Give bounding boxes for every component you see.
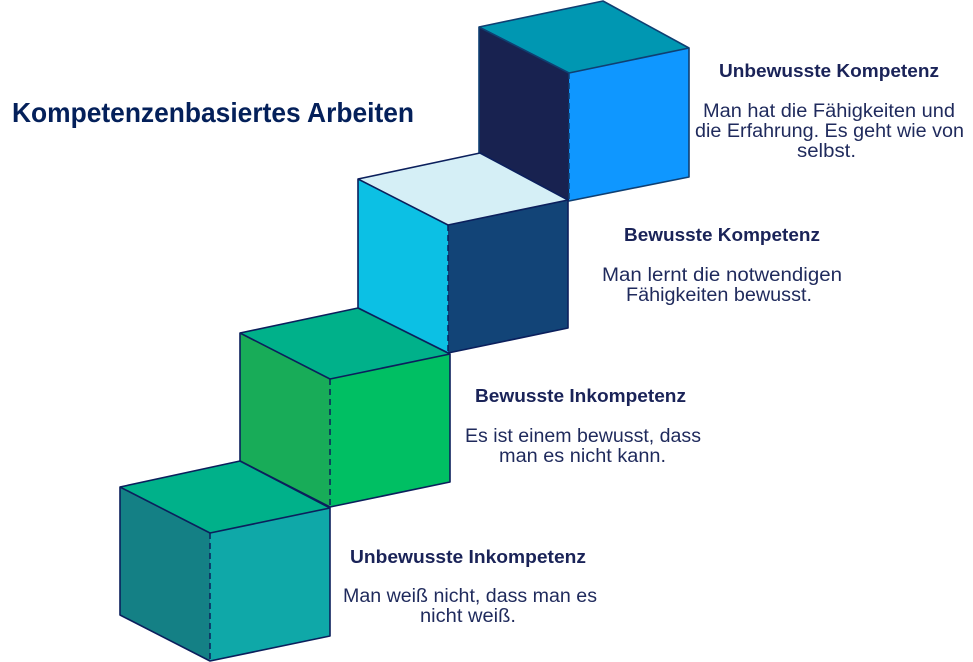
cube 3: Bewusste Kompetenz [358, 153, 568, 353]
cube 1: Unbewusste Inkompetenz [120, 461, 330, 661]
text block: Unbewusste Inkompetenz: Unbewusste Inkompetenz [350, 546, 586, 567]
cube 4: Unbewusste Kompetenz [479, 1, 689, 201]
text block: Unbewusste Kompetenz [695, 60, 964, 162]
text block: Bewusste Inkompetenz: Es ist einem bewusst, dass [465, 426, 701, 447]
text block: Bewusste Kompetenz: Man lernt die notwendigen [602, 265, 842, 286]
text block: Unbewusste Kompetenz: selbst. [797, 141, 856, 162]
text block: Unbewusste Inkompetenz: nicht weiß. [420, 606, 516, 627]
title: Kompetenzenbasiertes Arbeiten [12, 97, 414, 128]
text block: Unbewusste Kompetenz: Unbewusste Kompetenz [719, 60, 939, 81]
text block: Bewusste Inkompetenz [465, 385, 701, 467]
text block: Bewusste Kompetenz [602, 224, 842, 306]
text block: Unbewusste Kompetenz: Man hat die Fähigkeiten und [703, 101, 955, 122]
text block: Bewusste Kompetenz: Fähigkeiten bewusst. [626, 285, 812, 306]
text block: Unbewusste Inkompetenz: Man weiß nicht, dass man es [343, 586, 597, 607]
text block: Unbewusste Kompetenz: die Erfahrung. Es geht wie von [695, 121, 964, 142]
text block: Unbewusste Inkompetenz [343, 546, 597, 627]
text block: Bewusste Kompetenz: Bewusste Kompetenz [624, 224, 820, 245]
cube 2: Bewusste Inkompetenz [240, 308, 450, 507]
text block: Bewusste Inkompetenz: man es nicht kann. [499, 446, 666, 467]
text block: Bewusste Inkompetenz: Bewusste Inkompetenz [475, 385, 686, 406]
